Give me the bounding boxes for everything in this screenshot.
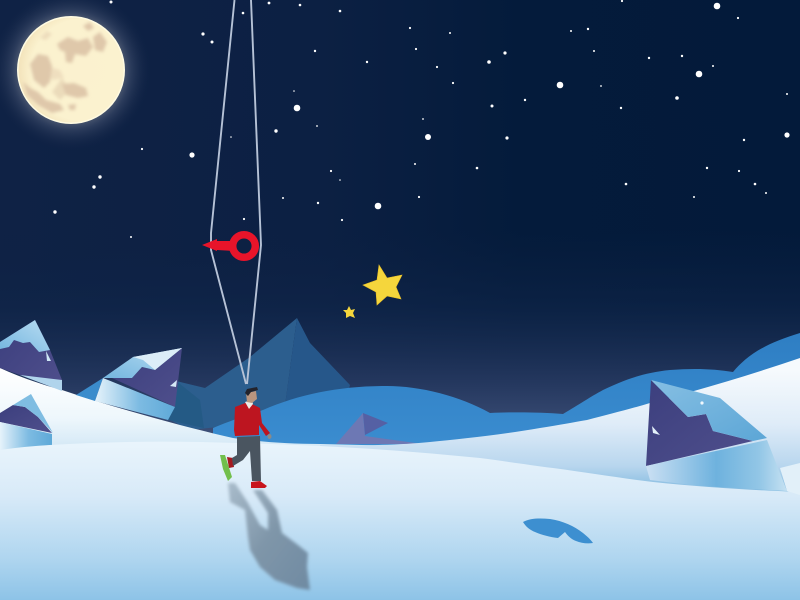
red sweater xyxy=(234,402,270,436)
rear sock red xyxy=(227,457,234,468)
red key-shaped arrow marker xyxy=(202,235,255,257)
rear shoe green xyxy=(220,455,232,481)
collar xyxy=(245,400,253,409)
foreground snowfield xyxy=(0,442,800,600)
trousers xyxy=(232,436,261,481)
pendulum strings xyxy=(211,0,261,384)
large yellow star xyxy=(363,265,402,305)
blue rolling hills xyxy=(213,333,800,470)
hair xyxy=(245,387,258,396)
ice block: upper centre-left xyxy=(76,348,204,428)
moon xyxy=(0,0,151,150)
left snow slope xyxy=(0,368,400,470)
small yellow star xyxy=(343,306,355,318)
ice block: right foreground xyxy=(646,380,787,491)
ice hole in snow xyxy=(523,518,593,543)
hand xyxy=(268,434,272,439)
night sky background xyxy=(0,0,800,460)
ice block: lower left xyxy=(0,394,53,450)
front shoe xyxy=(251,481,267,488)
neck and face xyxy=(246,391,257,403)
right snow slope xyxy=(320,358,800,510)
back mountain xyxy=(170,318,350,430)
snow bank right of ice block xyxy=(780,463,800,495)
ice block: upper left xyxy=(0,320,62,391)
small distant purple peak xyxy=(336,413,423,444)
stars field xyxy=(53,0,790,238)
person shadow xyxy=(228,483,310,590)
person walking xyxy=(220,387,272,488)
